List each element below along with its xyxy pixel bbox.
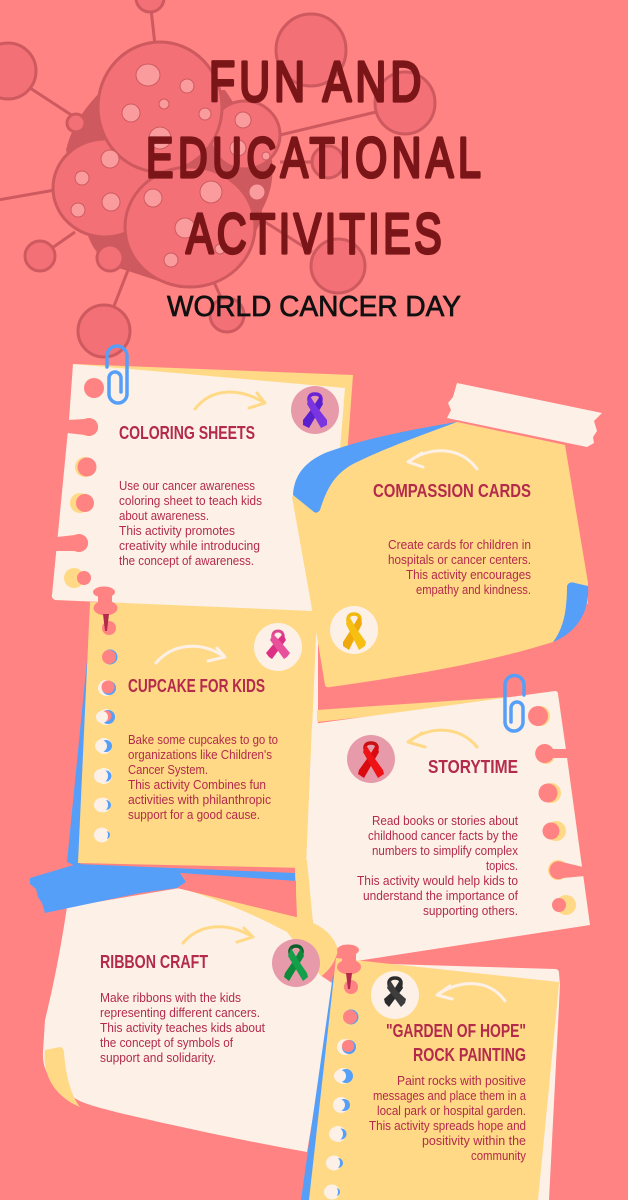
body text: topics.	[486, 859, 518, 873]
binder holes	[324, 1010, 358, 1200]
body text	[128, 733, 278, 822]
body text: organizations like Children's	[128, 748, 272, 762]
body text: local park or hospital garden.	[377, 1104, 526, 1118]
body text: community	[471, 1149, 527, 1163]
folded corner: top	[293, 422, 457, 513]
body text: This activity Combines fun	[128, 778, 266, 792]
arrow	[183, 927, 253, 943]
panel: compassion cards	[292, 383, 602, 687]
body text: the concept of symbols of	[100, 1036, 233, 1050]
panel: coloring sheets	[52, 364, 353, 611]
arrow	[156, 646, 225, 663]
icon: push pin	[337, 944, 361, 994]
body text: about awareness.	[119, 509, 209, 523]
body text: messages and place them in a	[373, 1089, 526, 1103]
body text	[119, 479, 262, 568]
icon: blue paperclip	[107, 346, 127, 403]
body text: Use our cancer awareness	[119, 479, 255, 493]
body text: activities with philanthropic	[128, 793, 271, 807]
body text: support and solidarity.	[100, 1051, 216, 1065]
body text: Read books or stories about	[372, 814, 518, 828]
body text: support for a good cause.	[128, 808, 260, 822]
title	[146, 49, 481, 266]
subtitle: WORLD CANCER DAY	[167, 291, 461, 323]
icon: purple ribbon	[291, 386, 339, 434]
heading: COLORING SHEETS	[119, 423, 255, 443]
icon: pink ribbon	[254, 623, 302, 671]
body text: This activity encourages	[406, 568, 531, 582]
heading: RIBBON CRAFT	[100, 952, 208, 972]
body text	[369, 1074, 527, 1163]
body text: Cancer System.	[128, 763, 208, 777]
title: EDUCATIONAL	[146, 125, 481, 190]
heading	[386, 1021, 526, 1065]
icon: push pin on cupcake panel	[93, 586, 118, 635]
arrow	[408, 730, 477, 747]
body text: This activity promotes	[119, 524, 235, 538]
panel: garden of hope rock painting	[301, 944, 560, 1200]
body text: hospitals or cancer centers.	[388, 553, 531, 567]
binder holes	[528, 706, 585, 915]
body text: numbers to simplify complex	[372, 844, 519, 858]
blue washi tape	[30, 864, 295, 913]
binder holes	[94, 650, 118, 842]
body text: the concept of awareness.	[119, 554, 254, 568]
panel: cupcake for kids	[67, 602, 318, 868]
body text: This activity teaches kids about	[100, 1021, 266, 1035]
body text: This activity would help kids to	[357, 874, 518, 888]
icon: red ribbon	[347, 735, 395, 783]
icon: gold ribbon	[330, 606, 378, 654]
icon: blue paperclip	[505, 676, 524, 731]
body text: empathy and kindness.	[416, 583, 531, 597]
body text: Make ribbons with the kids	[100, 991, 241, 1005]
panel: ribbon craft	[30, 860, 338, 1152]
arrow	[195, 392, 265, 409]
title: ACTIVITIES	[186, 201, 442, 266]
body text: This activity spreads hope and	[369, 1119, 526, 1133]
folded corner: bottom	[553, 582, 588, 642]
body text: representing different cancers.	[100, 1006, 260, 1020]
torn pink tape gap	[177, 873, 296, 917]
panel: storytime	[306, 691, 590, 962]
washi tape	[447, 383, 602, 447]
body text: Bake some cupcakes to go to	[128, 733, 278, 747]
body text	[357, 814, 519, 918]
title: FUN AND	[209, 49, 421, 113]
body text	[388, 538, 531, 597]
heading: ROCK PAINTING	[413, 1045, 526, 1065]
body text: Paint rocks with positive	[397, 1074, 526, 1088]
body text: Create cards for children in	[388, 538, 531, 552]
body text: childhood cancer facts by the	[368, 829, 518, 843]
body text: supporting others.	[423, 904, 518, 918]
background illustration: cancer cell cluster	[0, 0, 435, 357]
body text: coloring sheet to teach kids	[119, 494, 262, 508]
body text	[100, 991, 266, 1065]
arrow	[408, 451, 477, 469]
heading: CUPCAKE FOR KIDS	[128, 676, 265, 696]
heading: STORYTIME	[428, 757, 518, 777]
body text: understand the importance of	[363, 889, 518, 903]
arrow	[437, 984, 505, 1001]
body text: creativity while introducing	[119, 539, 260, 553]
body text: positivity within the	[422, 1134, 526, 1148]
binder holes	[55, 378, 104, 588]
heading: COMPASSION CARDS	[373, 481, 531, 501]
heading: "GARDEN OF HOPE"	[386, 1021, 526, 1041]
icon: black ribbon	[371, 971, 419, 1019]
icon: green ribbon	[272, 939, 320, 987]
